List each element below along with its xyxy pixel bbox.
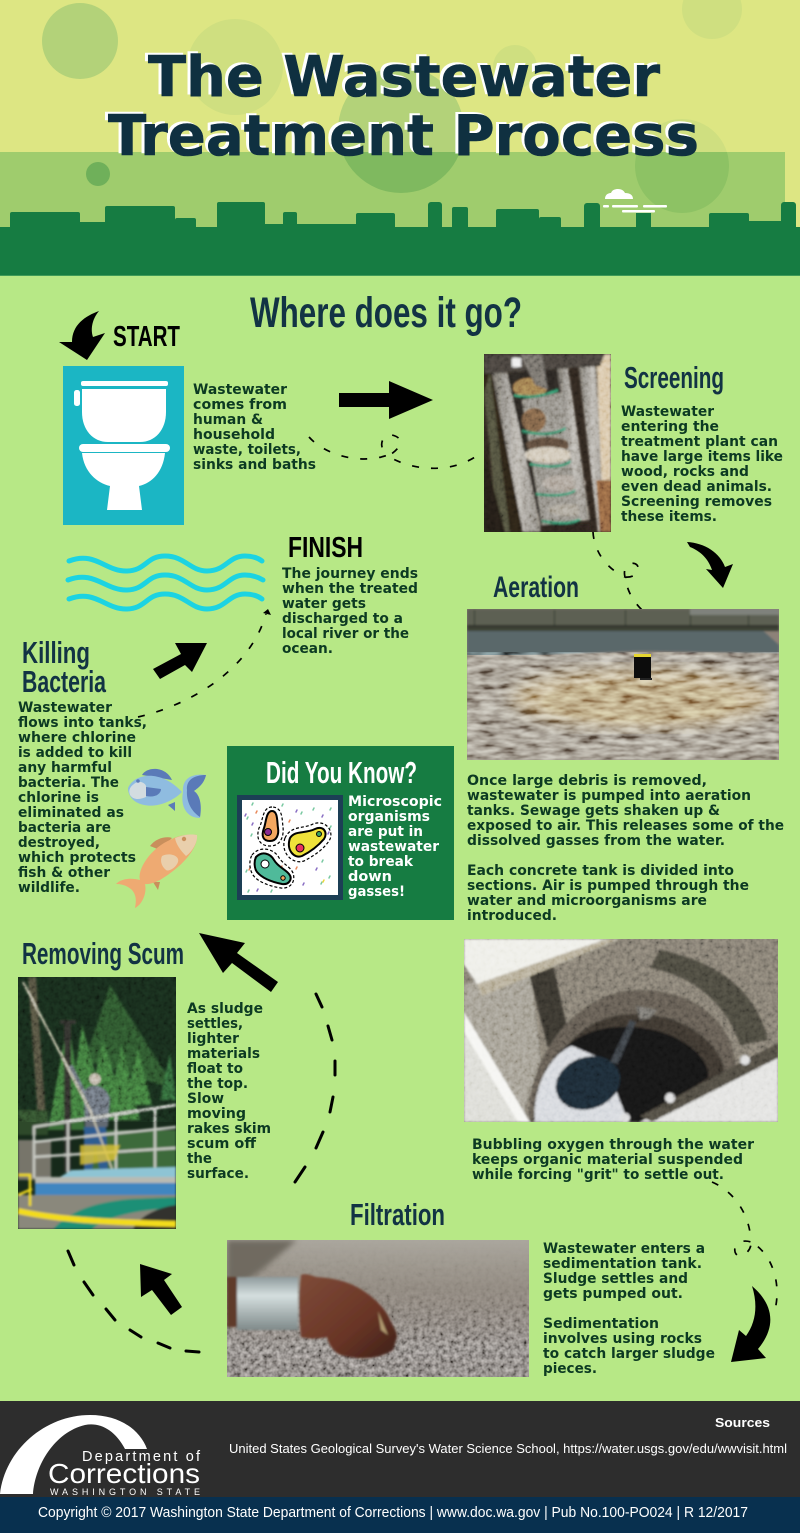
text: removing scum: materials [187, 1046, 260, 1062]
footer [0, 1401, 800, 1533]
text: finish [282, 566, 418, 657]
text: wastewater source: human & [193, 412, 263, 428]
arrow: to finish [153, 643, 207, 679]
text: filtration: pieces. [543, 1361, 597, 1377]
heading: killing bacteria: Killing [22, 635, 90, 670]
text: wastewater source: sinks and baths [193, 457, 316, 473]
text: screening: even dead animals. [621, 479, 772, 495]
panel: did you know [227, 746, 454, 920]
text: killing bacteria: chlorine is [18, 790, 99, 806]
text: screening: wood, rocks and [621, 464, 749, 480]
photo: removing scum [18, 977, 176, 1229]
text: killing bacteria: which protects [18, 850, 136, 866]
text: removing scum: Slow [187, 1091, 224, 1107]
icon: microorganisms [237, 795, 343, 900]
start label: START [113, 321, 180, 353]
yellow cell [284, 823, 331, 862]
text: did you know: are put in [348, 824, 423, 840]
logo: department of corrections: Department of [82, 1449, 201, 1465]
text: killing bacteria: fish & other [18, 865, 110, 881]
sources: United States Geological Survey's Water Science School, https://water.usgs.gov/edu/wwvisit.html [229, 1442, 787, 1456]
text: wastewater source: comes from [193, 397, 287, 413]
text: filtration: Sludge settles and [543, 1271, 688, 1287]
text: removing scum: lighter [187, 1031, 239, 1047]
text: killing bacteria: destroyed, [18, 835, 100, 851]
heading: did you know: Did You Know? [266, 755, 417, 790]
dashed path: filtration to removing scum [68, 1251, 199, 1352]
text: finish: The journey ends [282, 566, 418, 582]
teal cell [250, 849, 294, 888]
photo: aeration [467, 609, 779, 760]
text: wastewater source: household [193, 427, 275, 443]
text: killing bacteria: bacteria are [18, 820, 111, 836]
logo: department of corrections [0, 1415, 201, 1497]
arrow: to screening [339, 381, 433, 419]
icon: blue fish [128, 769, 206, 818]
text: screening: treatment plant can [621, 434, 778, 450]
text: finish: discharged to a [282, 611, 403, 627]
heading: killing bacteria [22, 635, 107, 699]
city skyline [0, 202, 800, 275]
text: removing scum: As sludge [187, 1001, 263, 1017]
text: aeration: exposed to air. This releases some of the [467, 818, 784, 834]
text: screening [621, 404, 783, 525]
dashed path: bacteria to finish [138, 609, 271, 717]
text: filtration: Wastewater enters a [543, 1241, 705, 1257]
copyright: Copyright © 2017 Washington State Department of Corrections | www.doc.wa.gov | Pub No.100-PO024 | R 12/2017 [38, 1505, 748, 1521]
arrow: to removing scum [140, 1264, 182, 1315]
text: killing bacteria: any harmful [18, 760, 112, 776]
text: bubbling oxygen: Bubbling oxygen through the water [472, 1137, 754, 1153]
heading: killing bacteria: Bacteria [22, 664, 107, 699]
logo: department of corrections: WASHINGTON STATE [50, 1487, 200, 1497]
text: aeration: dissolved gasses from the water. [467, 833, 725, 849]
text: filtration: Sedimentation [543, 1316, 659, 1332]
dashed path: removing scum to bacteria [295, 994, 335, 1182]
finish label: FINISH [288, 532, 363, 564]
arrow: to filtration [731, 1286, 770, 1362]
photo: pipe [227, 1240, 529, 1377]
text: screening: these items. [621, 509, 717, 525]
text: removing scum: scum off [187, 1136, 257, 1152]
orange cell [258, 807, 283, 846]
photo: screening [484, 354, 611, 532]
heading: screening: Screening [624, 360, 724, 395]
worker [84, 1085, 110, 1127]
header banner [0, 0, 800, 276]
text: aeration: sections. Air is pumped through the [467, 878, 749, 894]
text: removing scum: surface. [187, 1166, 249, 1182]
text: bubbling oxygen [472, 1137, 754, 1183]
icon: orange fish [116, 834, 197, 908]
sources [229, 1415, 787, 1456]
text: did you know: organisms [348, 809, 430, 825]
title: The Wastewater [148, 45, 660, 110]
text: filtration [543, 1241, 715, 1377]
text: removing scum: the top. [187, 1076, 248, 1092]
text: screening: Wastewater [621, 404, 714, 420]
text: did you know [348, 794, 442, 900]
sources: Sources [715, 1415, 770, 1430]
text: removing scum [187, 1001, 271, 1182]
text: bubbling oxygen: keeps organic material suspended [472, 1152, 743, 1168]
text: wastewater source [193, 382, 316, 473]
arrow: screening to aeration [687, 542, 733, 588]
text: killing bacteria: eliminated as [18, 805, 124, 821]
text: did you know: gasses! [348, 884, 405, 900]
text: killing bacteria: where chlorine [18, 730, 136, 746]
text: filtration: sedimentation tank. [543, 1256, 702, 1272]
text: removing scum: float to [187, 1061, 243, 1077]
heading: filtration: Filtration [350, 1197, 445, 1232]
text: killing bacteria [18, 700, 147, 896]
text: finish: local river or the [282, 626, 409, 642]
icon: cloud [603, 189, 667, 212]
logo: department of corrections: Corrections [48, 1458, 200, 1489]
heading: aeration: Aeration [493, 571, 579, 604]
text: filtration: gets pumped out. [543, 1286, 683, 1302]
dashed path: aeration to filtration [712, 1182, 777, 1310]
text: wastewater source: Wastewater [193, 382, 287, 398]
icon: toilet [63, 366, 184, 525]
text: killing bacteria: bacteria. The [18, 775, 119, 791]
text: wastewater source: waste, toilets, [193, 442, 301, 458]
arrow: to killing bacteria [199, 933, 278, 992]
dashed path: toilet to screening [309, 435, 478, 468]
text: killing bacteria: flows into tanks, [18, 715, 147, 731]
text: killing bacteria: Wastewater [18, 700, 112, 716]
heading: where does it go: Where does it go? [250, 289, 522, 337]
text: aeration [467, 773, 784, 924]
text: filtration: involves using rocks [543, 1331, 702, 1347]
text: aeration: wastewater is pumped into aeration [467, 788, 751, 804]
text: killing bacteria: wildlife. [18, 880, 80, 896]
start arrow [59, 311, 105, 360]
text: aeration: Once large debris is removed, [467, 773, 707, 789]
text: finish: ocean. [282, 641, 333, 657]
heading: removing scum: Removing Scum [22, 936, 184, 971]
text: aeration: water and microorganisms are [467, 893, 707, 909]
text: removing scum: the [187, 1151, 212, 1167]
text: removing scum: settles, [187, 1016, 243, 1032]
text: removing scum: moving [187, 1106, 246, 1122]
text: aeration: tanks. Sewage gets shaken up & [467, 803, 720, 819]
text: screening: have large items like [621, 449, 783, 465]
text: aeration: Each concrete tank is divided into [467, 863, 734, 879]
icon: water waves [68, 556, 263, 609]
text: finish: when the treated [282, 581, 418, 597]
text: bubbling oxygen: while forcing "grit" to settle out. [472, 1167, 724, 1183]
text: filtration: to catch larger sludge [543, 1346, 715, 1362]
text: killing bacteria: is added to kill [18, 745, 132, 761]
text: finish: water gets [282, 596, 366, 612]
photo: sedimentation tank [464, 939, 778, 1123]
text: did you know: to break [348, 854, 414, 870]
title [108, 45, 699, 169]
central cylinder [522, 392, 590, 525]
title: Treatment Process [108, 104, 699, 169]
text: aeration: introduced. [467, 908, 557, 924]
dashed path: screening to aeration [593, 532, 642, 610]
text: did you know: down [348, 869, 392, 885]
text: did you know: wastewater [348, 839, 439, 855]
text: screening: entering the [621, 419, 719, 435]
text: did you know: Microscopic [348, 794, 442, 810]
text: screening: Screening removes [621, 494, 772, 510]
text: removing scum: rakes skim [187, 1121, 271, 1137]
